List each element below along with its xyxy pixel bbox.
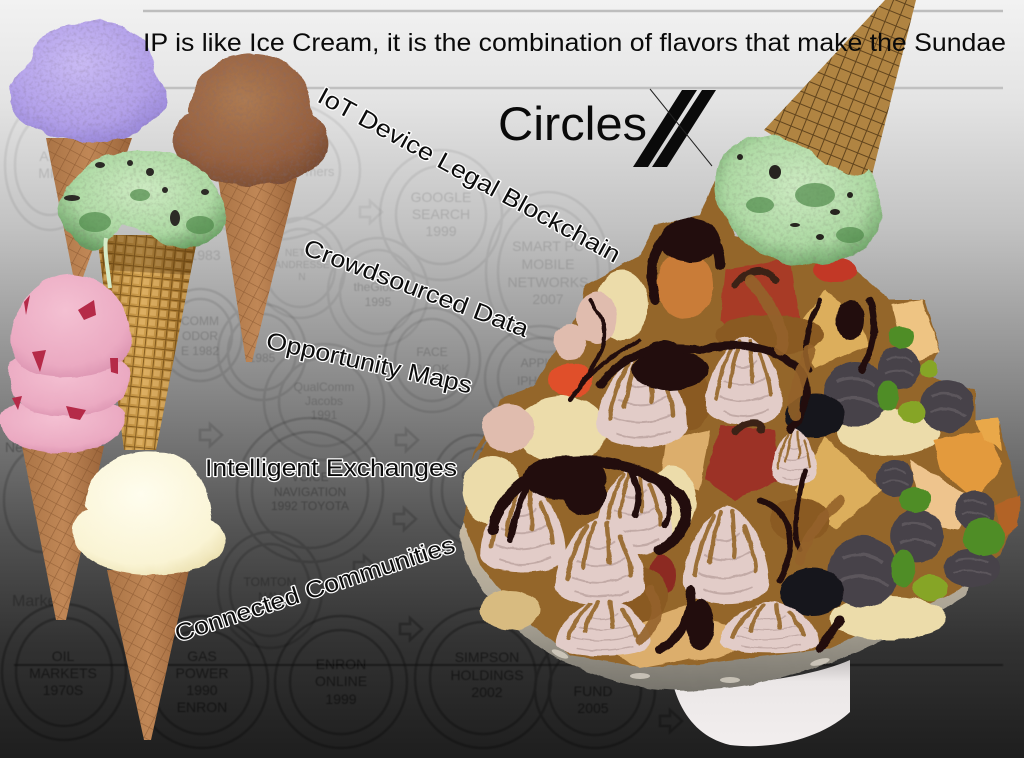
- faded labels: AI: [39, 148, 53, 164]
- faded labels: FACE: [416, 345, 448, 359]
- top mint scoop: [716, 135, 882, 265]
- green fruit: [877, 326, 1005, 601]
- faded labels: GO: [461, 467, 483, 483]
- mint scoop: [60, 150, 226, 288]
- cone: vanilla scoop: [72, 451, 225, 740]
- faded labels: SMART PC: [512, 238, 584, 254]
- faded labels: 1985: [249, 351, 276, 365]
- faded labels: 2002: [471, 684, 503, 700]
- logo: Circles with slashes: Circles: [498, 97, 647, 150]
- faded labels: N: [298, 272, 306, 283]
- faded labels: MI: [38, 165, 54, 181]
- chocolate scoop: [173, 54, 328, 185]
- faded labels: Markets: [12, 593, 69, 610]
- cone: chocolate scoop: [173, 54, 328, 362]
- waffle cone: [22, 446, 104, 620]
- label: IoT Device Legal Blockchain: IoT Device Legal Blockchain: [313, 83, 625, 269]
- arrows: [200, 201, 682, 732]
- faded labels: MOBILE: [522, 256, 574, 272]
- vanilla scoop: [72, 451, 225, 575]
- dotted wafer: [590, 600, 725, 668]
- faded labels: NETSC: [285, 248, 319, 259]
- faded labels: 2007: [532, 291, 564, 307]
- faded labels: 1990: [186, 682, 218, 698]
- waffle cone: [218, 178, 297, 362]
- pink scoops: [0, 274, 132, 453]
- faded labels: BOOK: [415, 362, 449, 376]
- faded labels: SIMPSON: [455, 649, 519, 665]
- meringue swirls: [480, 336, 818, 656]
- chocolate drizzle: [493, 218, 874, 651]
- faded labels: QualComm: [294, 380, 354, 394]
- cone: mint chip scoop: [60, 150, 226, 450]
- faded labels: 1983: [189, 247, 221, 263]
- pink pieces: [482, 292, 617, 452]
- top rings: [5, 100, 610, 352]
- faded labels: 1995: [365, 295, 392, 309]
- faded labels: NAVIGATION: [274, 485, 346, 499]
- middle rings: [158, 289, 595, 460]
- orange fruit pieces: [892, 300, 1020, 540]
- faded labels: APPLE: [521, 356, 559, 370]
- scoop on sundae: [716, 0, 916, 265]
- faded labels: ENRON: [316, 656, 366, 672]
- faded labels: [5, 148, 612, 716]
- faded labels: GOOGLE: [411, 189, 471, 205]
- faded labels: FUND: [574, 683, 612, 699]
- waffle cone: [97, 235, 198, 450]
- faded labels: ODOR: [182, 329, 218, 343]
- faded labels: SEARCH: [412, 206, 470, 222]
- strawberry chunks: [12, 295, 118, 420]
- bottom rings: [2, 604, 655, 748]
- faded labels: NAV: [258, 590, 282, 604]
- label: Intelligent Exchanges: Intelligent Exchanges: [205, 455, 457, 482]
- faded labels: E 1982: [181, 344, 219, 358]
- faded labels: ENRON: [177, 699, 227, 715]
- faded labels: HOLDINGS: [450, 667, 524, 683]
- logo: Circles with slashes: [498, 89, 716, 167]
- faded labels: ANDRESSE: [274, 260, 330, 271]
- faded labels: TOMTOM: [244, 575, 296, 589]
- faded labels: POWER: [176, 665, 228, 681]
- faded labels: NETWORKS: [508, 274, 588, 290]
- lower rings: [4, 418, 519, 648]
- cone: strawberry triple scoop: [0, 274, 132, 620]
- sundae contents: [462, 180, 1020, 668]
- base mound: [463, 180, 1020, 667]
- second rule: [143, 87, 1003, 89]
- label: Crowdsourced Data: Crowdsourced Data: [300, 234, 533, 343]
- faded labels: mers: [306, 164, 335, 179]
- inverted cone: [764, 0, 916, 195]
- faded labels: VOICE: [291, 470, 329, 484]
- faded labels: 1999: [425, 223, 457, 239]
- purple scoop: [8, 21, 167, 142]
- caramel pools: [612, 315, 830, 623]
- faded labels: GAS: [187, 648, 217, 664]
- waffle cone: [46, 138, 132, 280]
- chocolate balls: [823, 346, 1000, 608]
- faded labels: 2005: [577, 700, 609, 716]
- faded labels: Jacobs: [305, 394, 343, 408]
- faded labels: OIL: [52, 648, 74, 664]
- faded labels: 1999: [325, 691, 357, 707]
- faded labels: MARKETS: [29, 665, 97, 681]
- faded labels: ONLINE: [315, 673, 367, 689]
- faded labels: 1970S: [43, 682, 83, 698]
- top rule: [143, 10, 1003, 12]
- faded labels: theGlobe: [354, 280, 403, 294]
- title: IP is like Ice Cream, it is the combination of flavors that make the Sundae: [143, 30, 1006, 57]
- faded labels: 1991: [311, 408, 338, 422]
- cream pieces: [462, 270, 946, 660]
- fruit wedges with berries: [549, 251, 882, 616]
- glass bowl: [460, 510, 975, 691]
- horizontal rule: [14, 664, 1003, 666]
- faded labels: 1992 TOYOTA: [271, 499, 349, 513]
- faded labels: IPHONE: [517, 374, 563, 388]
- label: Opportunity Maps: Opportunity Maps: [264, 327, 475, 399]
- faded labels: COMM: [181, 314, 219, 328]
- label: Connected Communities: Connected Communities: [172, 531, 459, 648]
- faded labels: Ne: [5, 439, 23, 455]
- cone: purple scoop: [8, 21, 167, 280]
- stem: [672, 660, 850, 746]
- caramel sauce: [640, 280, 840, 640]
- waffle cone: [107, 570, 189, 740]
